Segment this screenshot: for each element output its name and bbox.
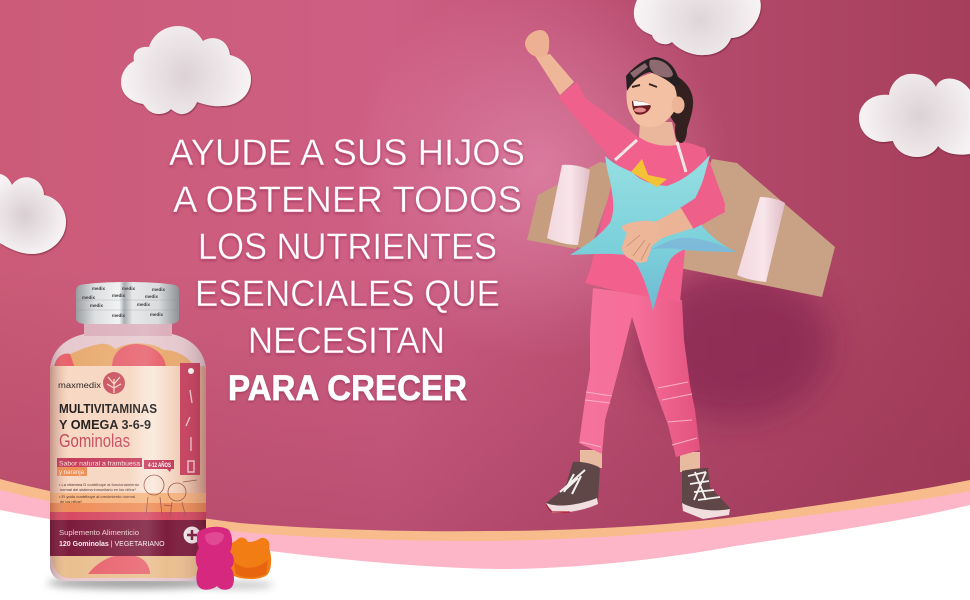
flavour tags: y naranja bbox=[59, 470, 85, 476]
benefits text: de los niños* bbox=[60, 500, 83, 504]
gummies bottom bbox=[52, 556, 204, 578]
star pillow bbox=[570, 155, 737, 311]
bottle shadow bbox=[47, 577, 223, 589]
cap: medix bbox=[137, 302, 151, 307]
age badge bbox=[144, 460, 174, 472]
bottle sheen bbox=[50, 322, 206, 582]
flavour tags bbox=[57, 458, 142, 476]
neck bbox=[639, 122, 677, 146]
cap: medix bbox=[112, 313, 126, 318]
product title: Y OMEGA 3-6-9 bbox=[59, 418, 151, 432]
mouth bbox=[632, 101, 651, 115]
left roll bbox=[547, 165, 590, 245]
girl figure bbox=[525, 30, 835, 519]
label bbox=[50, 366, 206, 556]
eyes bbox=[632, 84, 657, 87]
cross badge bbox=[184, 526, 200, 544]
age badge: 4-12 AÑOS bbox=[148, 462, 171, 469]
left wing bbox=[527, 162, 620, 250]
right sleeve bbox=[680, 142, 725, 229]
cap: medix bbox=[82, 295, 96, 300]
supplement text bbox=[59, 528, 165, 548]
heading: NECESITAN bbox=[248, 319, 445, 361]
straps bbox=[615, 140, 686, 172]
product title bbox=[59, 402, 157, 451]
cloud top left bbox=[121, 26, 251, 114]
neck shading bbox=[84, 322, 172, 336]
cap: medix bbox=[90, 303, 104, 308]
orange bear bbox=[229, 538, 271, 579]
cap: medix bbox=[145, 294, 159, 299]
product title: MULTIVITAMINAS bbox=[59, 402, 157, 416]
heading: ESENCIALES QUE bbox=[195, 272, 500, 314]
hair and braid bbox=[655, 70, 693, 143]
brand: maxmedix bbox=[58, 380, 102, 390]
benefits text bbox=[59, 483, 139, 504]
bottom wave bbox=[0, 479, 970, 600]
cloud left bbox=[0, 174, 66, 254]
product bottle bbox=[47, 282, 223, 589]
star shadow bbox=[627, 238, 737, 256]
bottle glass bbox=[50, 322, 206, 581]
shoe right bbox=[682, 468, 730, 519]
benefits text: normal del sistema inmunitario en los niños* bbox=[60, 488, 137, 492]
legging creases bbox=[581, 382, 697, 447]
heading: A OBTENER TODOS bbox=[173, 178, 522, 220]
gummies top bbox=[54, 343, 194, 368]
cap: medix bbox=[152, 287, 166, 292]
pink bear bbox=[196, 527, 234, 590]
heading: PARA CRECER bbox=[228, 369, 467, 408]
ankle right bbox=[680, 452, 700, 472]
gummy bears bbox=[196, 527, 274, 590]
gummy shadow bbox=[206, 581, 274, 589]
cap: medix bbox=[112, 293, 126, 298]
yellow star on shirt bbox=[631, 159, 667, 187]
shirt bbox=[585, 137, 714, 302]
leggings bbox=[579, 288, 700, 457]
heading: AYUDE A SUS HIJOS bbox=[169, 131, 525, 173]
children drawing bbox=[144, 475, 197, 518]
cap bbox=[76, 282, 179, 324]
heading: LOS NUTRIENTES bbox=[198, 225, 497, 267]
cuff and forearm bbox=[622, 187, 725, 263]
ear bbox=[672, 96, 684, 114]
heading bbox=[169, 131, 525, 408]
side panel bbox=[180, 363, 200, 475]
benefits text: • La vitamina D contribuye al funcionamiento bbox=[59, 483, 139, 487]
supplement text: 120 Gominolas | VEGETARIANO bbox=[59, 541, 165, 548]
supplement text: Suplemento Alimenticio bbox=[59, 528, 139, 537]
ankle left bbox=[580, 450, 602, 468]
benefits text: • El yodo contribuye al crecimiento normal bbox=[59, 495, 135, 499]
fist bbox=[525, 30, 549, 57]
cloud top right bbox=[634, 0, 761, 55]
cloud right bbox=[859, 74, 970, 157]
left sleeve bbox=[558, 82, 640, 160]
flavour tags: Sabor natural a frambuesa bbox=[59, 460, 140, 468]
right wing bbox=[680, 159, 835, 297]
product title: Gominolas bbox=[59, 431, 130, 451]
cap: medix bbox=[122, 286, 136, 291]
cap: medix bbox=[92, 286, 106, 291]
cap: medix bbox=[150, 312, 164, 317]
brand bbox=[58, 372, 125, 394]
face bbox=[627, 72, 677, 127]
goggles bbox=[626, 57, 680, 91]
raised arm bbox=[535, 54, 574, 95]
right roll bbox=[737, 197, 785, 282]
shoe left bbox=[546, 462, 600, 513]
